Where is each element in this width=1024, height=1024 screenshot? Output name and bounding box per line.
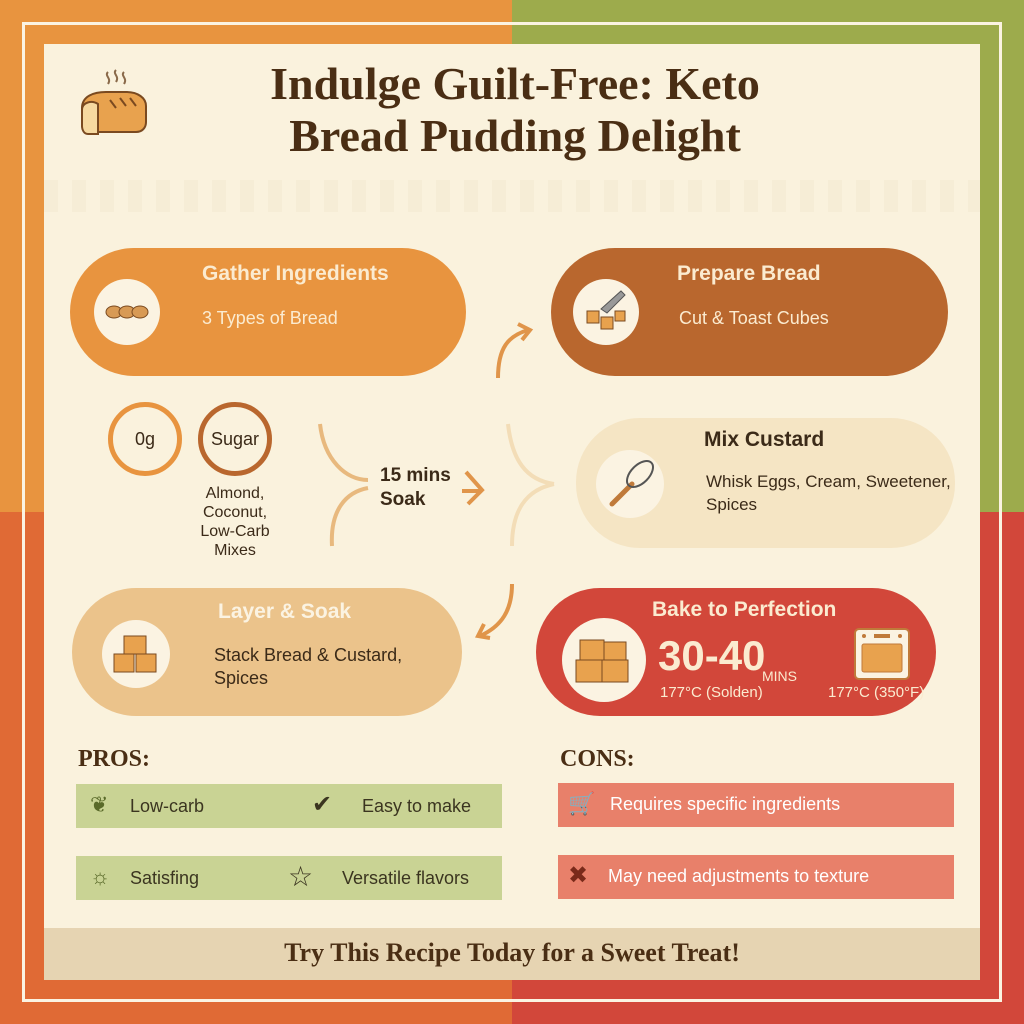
icon: bread cubes and knife	[573, 279, 639, 345]
arrow: down-left curve	[475, 584, 514, 640]
pros row 1: Easy to make	[362, 796, 471, 816]
cons row 2: ✖	[568, 862, 588, 889]
soak label with brackets	[318, 424, 554, 546]
card: layer & soak	[72, 588, 462, 716]
title: Bread Pudding Delight	[289, 110, 741, 161]
card: layer & soak: Spices	[214, 668, 268, 688]
card: layer & soak: Stack Bread & Custard,	[214, 645, 402, 665]
cons row 2	[558, 855, 954, 899]
icon: oven	[854, 628, 910, 680]
card: bake to perfection: 30-40	[658, 632, 765, 679]
cons row 2: May need adjustments to texture	[608, 866, 869, 886]
footer banner	[44, 928, 980, 980]
pros row 2: ☆	[288, 861, 313, 892]
card: prepare bread: Cut & Toast Cubes	[679, 308, 829, 328]
icon: whisk	[596, 450, 664, 518]
stat: 0g sugar: Low-Carb	[200, 523, 270, 540]
card: mix custard: Spices	[706, 495, 757, 514]
pros row 2: Versatile flavors	[342, 868, 469, 888]
card: bake to perfection	[536, 588, 936, 716]
pros row 1: ✔	[312, 791, 332, 818]
arrow: up curve	[496, 322, 533, 378]
card: prepare bread	[551, 248, 948, 376]
stat: 0g sugar: Mixes	[214, 542, 256, 559]
pros row 1: Low-carb	[130, 796, 204, 816]
card: bake to perfection: Bake to Perfection	[652, 598, 836, 621]
title: Indulge Guilt-Free: Keto	[270, 58, 760, 109]
title	[270, 58, 760, 161]
card: prepare bread: Prepare Bread	[677, 262, 821, 285]
card: layer & soak: Layer & Soak	[218, 600, 351, 623]
soak label with brackets: 15 mins	[380, 465, 451, 486]
card: bake to perfection: 177°C (Solden)	[660, 684, 763, 701]
icon: bread loaf	[81, 69, 147, 135]
card: mix custard	[576, 418, 955, 548]
card: gather ingredients: Gather Ingredients	[202, 262, 389, 285]
stat: 0g sugar: Coconut,	[203, 504, 267, 521]
icon: braided bread	[94, 279, 160, 345]
stat: 0g sugar	[108, 402, 272, 559]
card: mix custard: Whisk Eggs, Cream, Sweetener,	[706, 472, 951, 491]
card: mix custard: Mix Custard	[704, 428, 824, 451]
card: gather ingredients: 3 Types of Bread	[202, 308, 338, 328]
stat: 0g sugar: Sugar	[211, 429, 259, 449]
pros row 2	[76, 856, 502, 900]
pros row 2: Satisfing	[130, 868, 199, 888]
icon: stacked cubes	[102, 620, 170, 688]
stat: 0g sugar: 0g	[135, 429, 155, 449]
card: bake to perfection: MINS	[762, 668, 797, 684]
decorative band	[44, 180, 980, 212]
cons row 1: 🛒	[568, 791, 595, 816]
soak label with brackets: Soak	[380, 489, 425, 510]
stat: 0g sugar: Almond,	[206, 485, 264, 502]
cons row 1	[558, 783, 954, 827]
icon: baked pudding	[562, 618, 646, 702]
cons row 1: Requires specific ingredients	[610, 794, 840, 814]
card: bake to perfection: 177°C (350°F)	[828, 684, 924, 701]
pros row 1: ❦	[90, 792, 108, 817]
pros row 1	[76, 784, 502, 828]
pros row 2: ☼	[90, 864, 110, 889]
cons heading: CONS:	[560, 746, 635, 772]
card: gather ingredients	[70, 248, 466, 376]
pros heading: PROS:	[78, 746, 150, 772]
footer banner: Try This Recipe Today for a Sweet Treat!	[284, 938, 740, 967]
